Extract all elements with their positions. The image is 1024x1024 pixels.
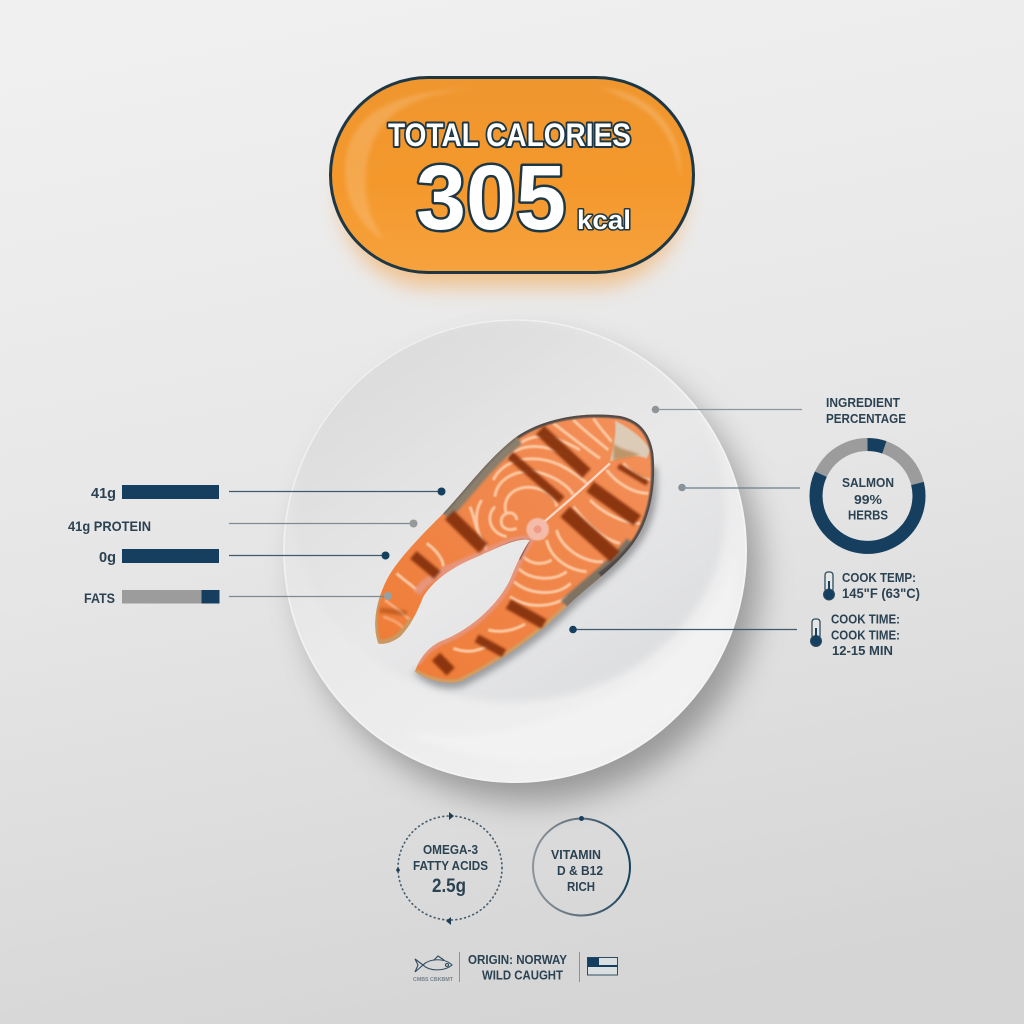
arrows (449, 812, 454, 820)
protein row: 41g bar: 41g (91, 486, 116, 502)
fats row: FATS (84, 590, 115, 606)
carbohydrate row: 0g bar (99, 549, 390, 566)
cook time: COOK TIME: (831, 612, 900, 626)
plate (283, 319, 760, 802)
calorie badge (330, 78, 694, 287)
grill marks (380, 430, 647, 672)
icon: thermometer (824, 572, 834, 600)
ingredient percentage: HERBS (848, 508, 888, 522)
heading: INGREDIENT (826, 395, 900, 410)
icon: thermometer (810, 619, 822, 646)
carbohydrate row: 0g bar: 0g (99, 550, 116, 566)
cook temperature: 145"F (63"C) (842, 586, 920, 601)
cook time: COOK TIME: (831, 628, 900, 642)
cook time (569, 612, 900, 658)
cook temperature (824, 570, 920, 601)
calorie value: 305 (416, 147, 566, 249)
calorie unit: kcal (577, 205, 631, 235)
icon: fish (415, 956, 452, 972)
origin footer: CMBS CBKBMT (413, 977, 454, 983)
vitamin badge: RICH (567, 879, 595, 894)
cook time: 12-15 MIN (832, 643, 893, 658)
spine and bone (544, 462, 611, 522)
vitamin badge: VITAMIN (551, 847, 601, 862)
salmon steak (375, 415, 657, 689)
omega-3 badge: 2.5g (432, 876, 466, 897)
omega-3 badge (396, 812, 502, 925)
origin text: ORIGIN: NORWAY (468, 952, 567, 967)
protein label (68, 518, 418, 534)
vitamin badge: D & B12 (557, 863, 603, 878)
ingredient percentage: 99% (854, 492, 882, 507)
cook temperature: COOK TEMP: (842, 570, 916, 585)
ingredient percentage: PERCENTAGE (826, 411, 906, 426)
icon: flag (588, 958, 618, 975)
donut chart (816, 444, 919, 548)
omega-3 badge: OMEGA-3 (423, 842, 478, 857)
donut label: SALMON (842, 475, 894, 490)
skin edges (443, 437, 517, 513)
ingredient percentage (652, 395, 919, 548)
origin footer (413, 952, 618, 983)
fat lines (383, 418, 650, 651)
protein label: 41g PROTEIN (68, 518, 151, 534)
fats row (84, 590, 392, 606)
protein row: 41g bar (91, 485, 446, 502)
leader lines and nutrient bars (68, 485, 446, 606)
omega-3 badge: FATTY ACIDS (413, 858, 488, 873)
vitamin badge (533, 816, 630, 916)
origin footer: WILD CAUGHT (482, 968, 563, 982)
badge title: TOTAL CALORIES (388, 117, 631, 153)
